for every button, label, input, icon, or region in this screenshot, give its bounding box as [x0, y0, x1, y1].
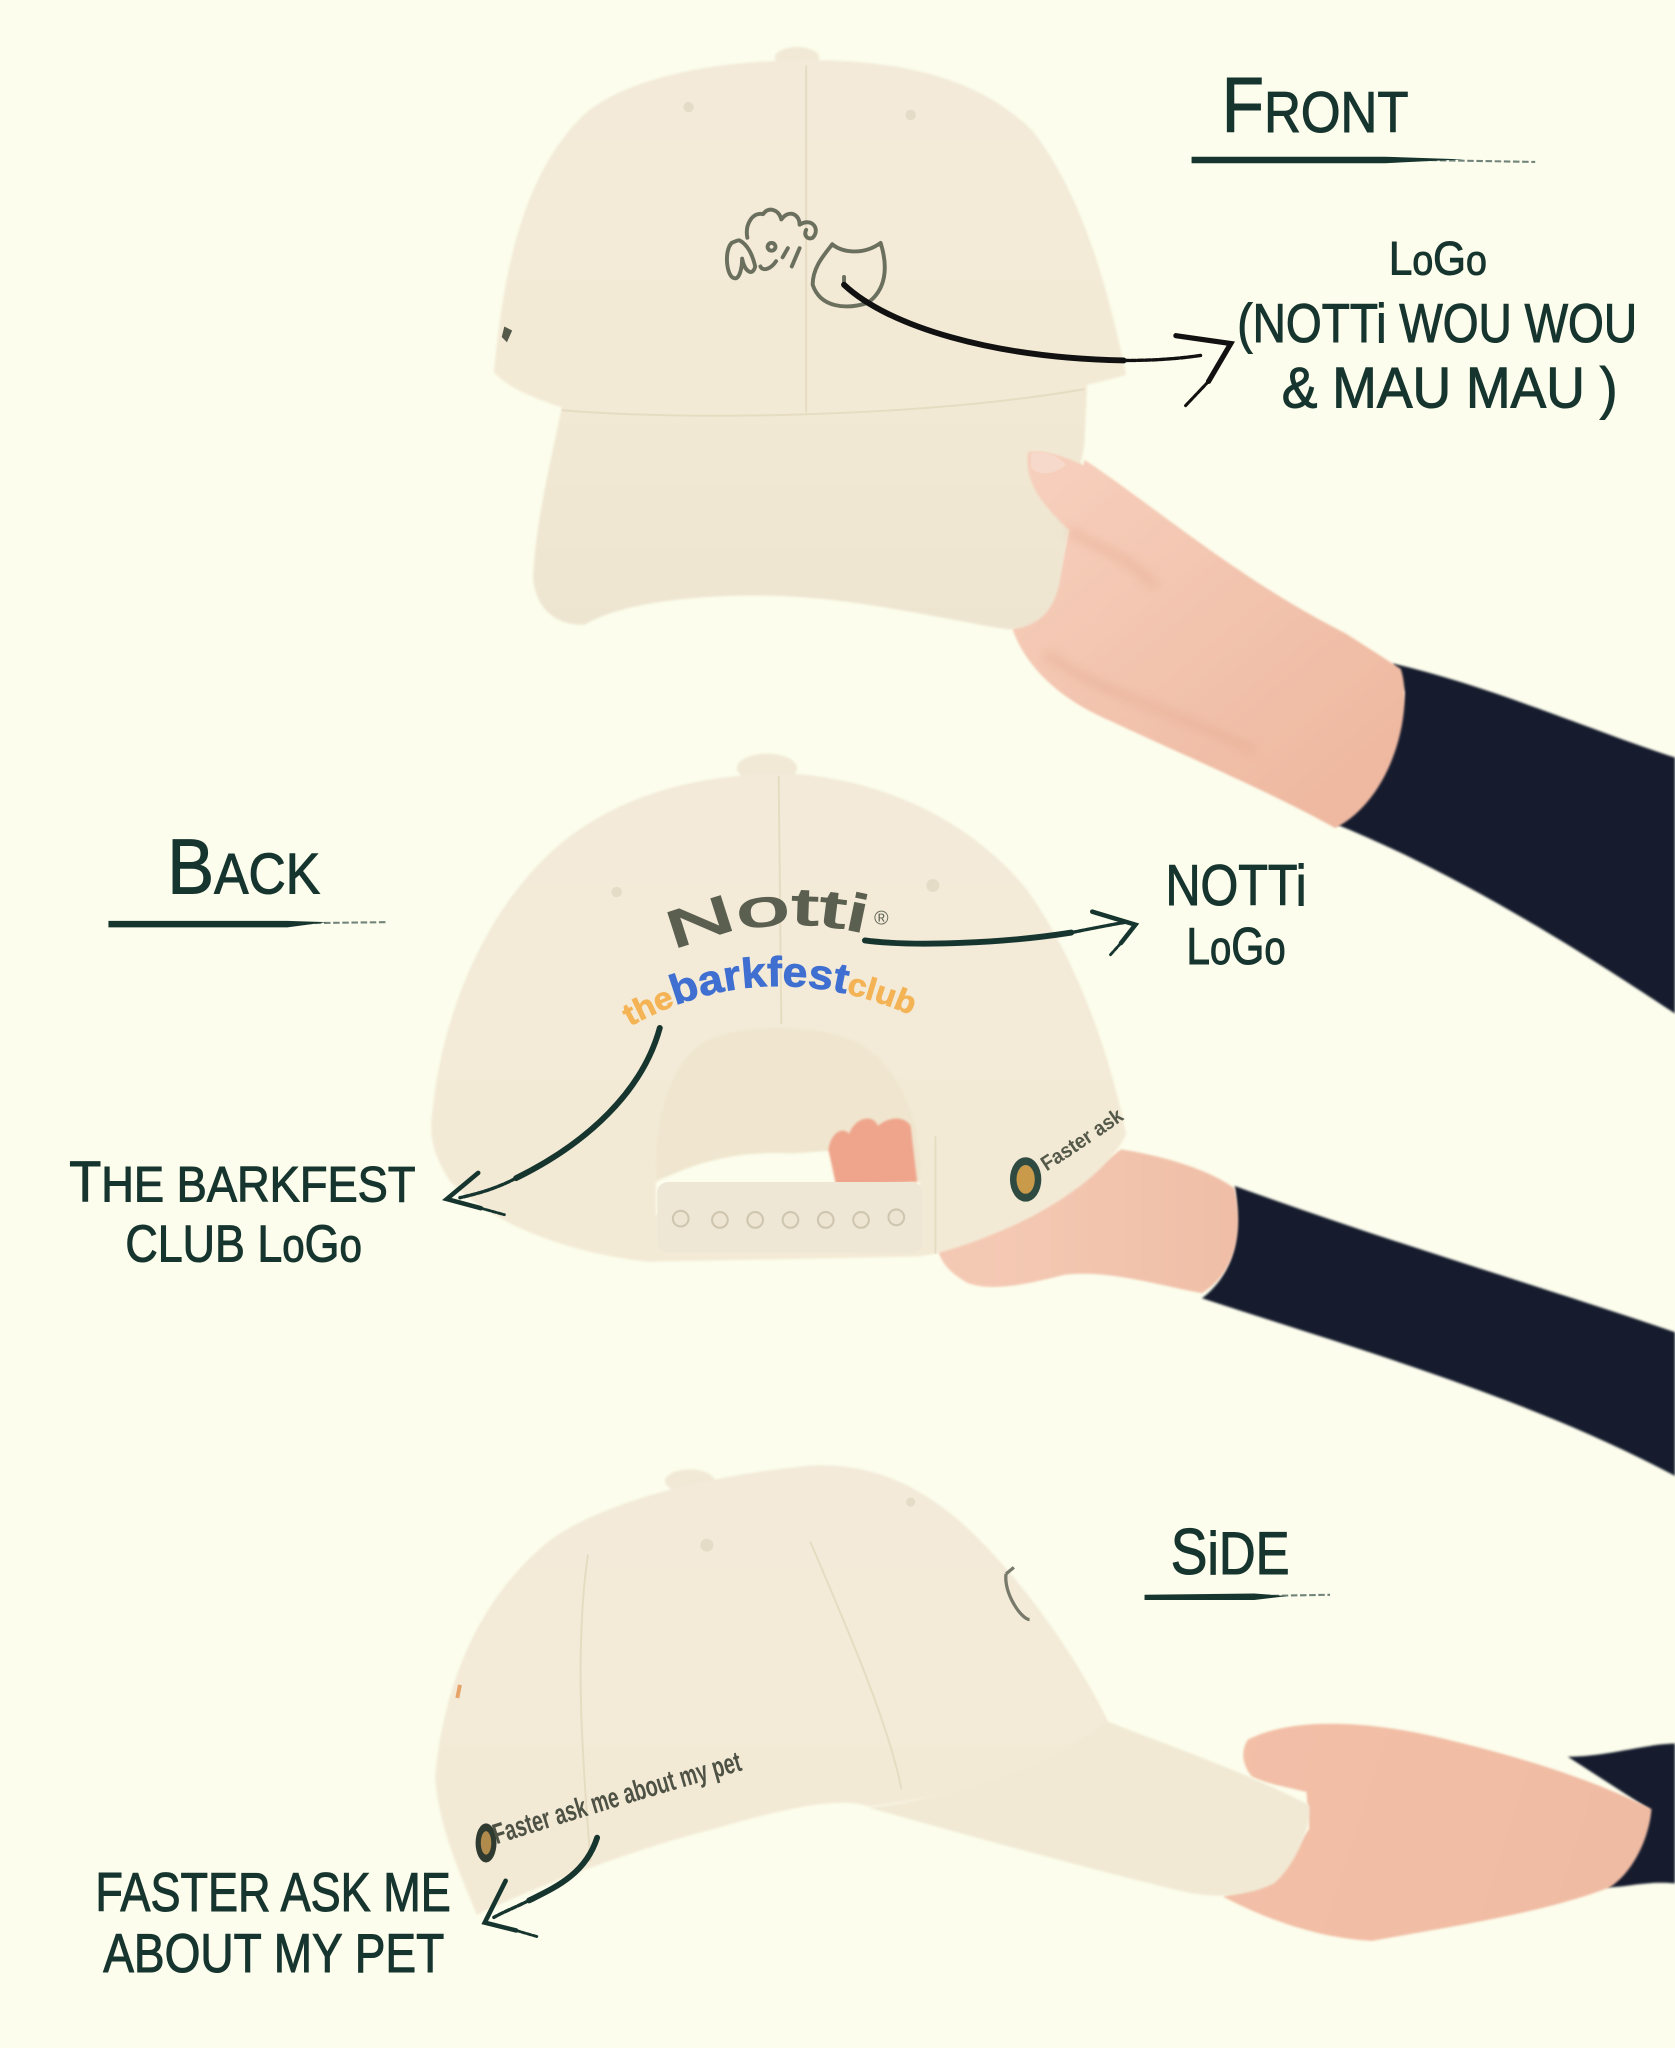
side button: [665, 1469, 715, 1493]
label: notti logo: LoGo: [1186, 918, 1286, 976]
side brim: [869, 1720, 1309, 1896]
label: the barkfest club logo: [69, 1151, 415, 1274]
side seams: [581, 1541, 902, 1861]
thumbnail: [1031, 453, 1066, 473]
embroidery: Notti: Notti: [667, 890, 868, 948]
label: faster ask me about my pet: ABOUT MY PET: [103, 1922, 444, 1984]
underline: front: [1192, 157, 1535, 163]
embroidery: the barkfest club: thebarkfestclub: [622, 955, 914, 1025]
heading: front: FRONT: [1222, 61, 1408, 149]
heading: back: BACK: [167, 822, 320, 910]
badge on back strap side: [1010, 1157, 1041, 1202]
underline: side: [1145, 1593, 1330, 1600]
arrow: faster ask to label: [485, 1838, 597, 1937]
back hand: [938, 1149, 1238, 1293]
side hat: [435, 1465, 1309, 1915]
underline: back: [108, 921, 388, 927]
panel: front view: [494, 47, 1675, 1014]
glimpse of back embroidery: [457, 1685, 460, 1698]
front brim: [533, 385, 1087, 630]
label: the barkfest club logo: THE BARKFEST: [69, 1151, 415, 1215]
side sleeve: [1568, 1744, 1675, 1887]
front hand: [1013, 460, 1405, 828]
heading: side: SiDE: [1171, 1515, 1290, 1588]
arrow: cat logo to label: [844, 285, 1231, 406]
arrow: notti to label: [865, 912, 1135, 956]
label: logo: LoGo: [1389, 231, 1487, 284]
label: notti logo: [1165, 854, 1307, 976]
back hat: [431, 754, 1126, 1262]
back strap: [657, 1182, 922, 1253]
panel: side view: [95, 1465, 1675, 1984]
label: faster ask me about my pet: [95, 1861, 451, 1984]
back crown: [431, 773, 1126, 1262]
strap holes: [673, 1209, 904, 1228]
embroidery: faster ask (back): Faster ask: [1040, 1110, 1125, 1171]
back sleeve: [1202, 1186, 1675, 1476]
front sleeve: [1333, 664, 1675, 1014]
label: notti logo: NOTTi: [1165, 854, 1307, 918]
panel: back view: [69, 754, 1675, 1477]
doodle dog: [727, 210, 816, 278]
embroidery: faster ask me about my pet: Faster ask me about my pet: [492, 1752, 743, 1844]
front hat: [494, 47, 1126, 630]
arrow: barkfest to label: [447, 1028, 660, 1215]
label: logo: [1237, 231, 1637, 421]
back seams: [779, 776, 935, 1254]
fingers through the opening: [828, 1118, 917, 1186]
back eyelets: [611, 879, 939, 897]
logo doodle: dog and cat: [727, 210, 885, 306]
side badge: [476, 1823, 496, 1863]
doodle cat: [813, 243, 885, 306]
embroidery: registered mark: ®: [874, 908, 889, 930]
back opening interior: [656, 1028, 921, 1182]
thumb over the brim: [1027, 451, 1150, 581]
front button: [775, 47, 819, 68]
front crown: [494, 60, 1126, 415]
front side embroidery: [502, 327, 512, 342]
label: faster ask me about my pet: FASTER ASK ME: [95, 1861, 451, 1923]
front eyelets: [683, 102, 916, 120]
label: logo: & MAU MAU ): [1282, 357, 1618, 421]
glimpse of front doodle: [1006, 1567, 1030, 1620]
front seams: [562, 65, 1084, 416]
back opening gap: [657, 1151, 836, 1186]
side hand: [1223, 1724, 1651, 1941]
back button: [737, 754, 797, 782]
side eyelets: [700, 1497, 915, 1552]
thumb crease shading: [1045, 530, 1254, 751]
side crown: [435, 1465, 1108, 1915]
label: the barkfest club logo: CLUB LoGo: [125, 1216, 362, 1274]
